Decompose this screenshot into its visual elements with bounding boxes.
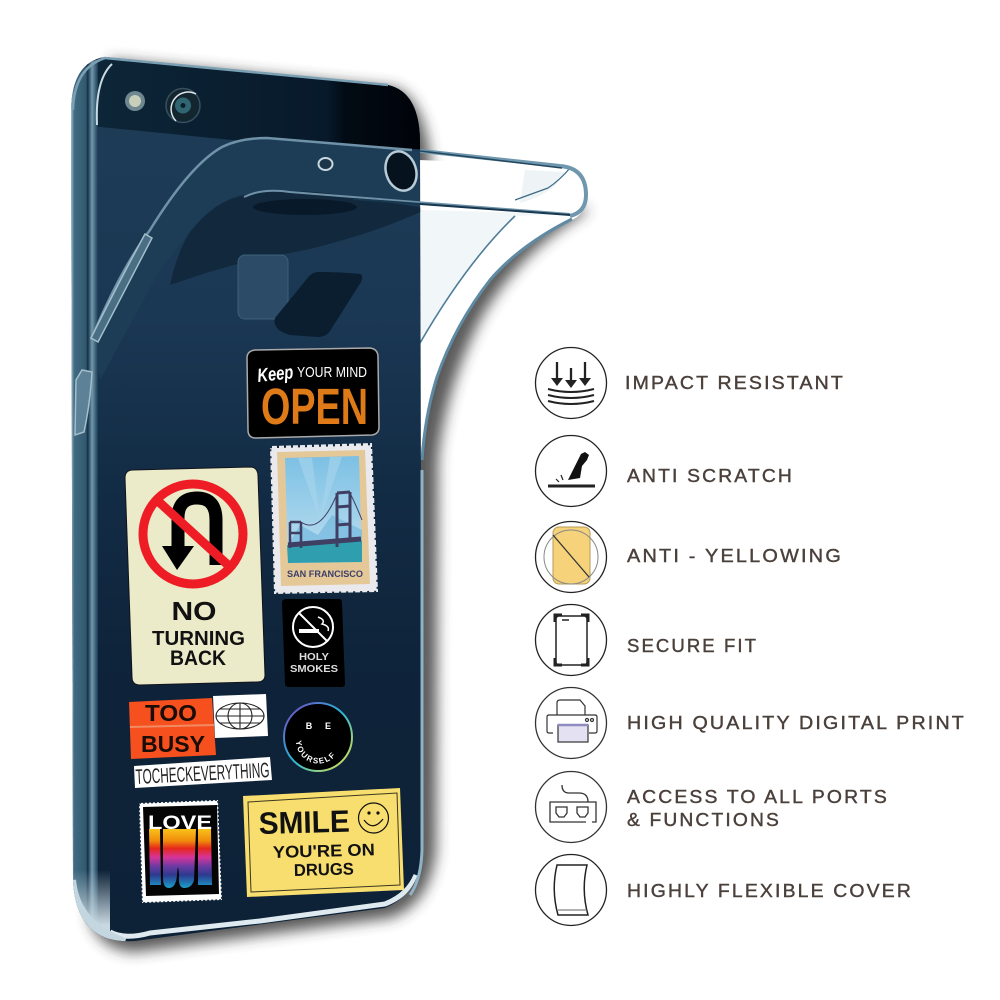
icon: phone case corners (536, 604, 606, 676)
sticker: san francisco stamp (270, 444, 378, 594)
feature: highly flexible cover (536, 854, 913, 926)
label: ACCESS TO ALL PORTS (627, 787, 889, 807)
label: & FUNCTIONS (627, 810, 781, 830)
label: ANTI - YELLOWING (627, 546, 843, 566)
icon: ports (536, 772, 606, 842)
dark top glass band (90, 57, 420, 150)
fingerprint square (238, 255, 288, 319)
label: IMPACT RESISTANT (625, 373, 845, 393)
flash (125, 91, 145, 111)
case small hole (318, 158, 332, 170)
sticker: no turning back (125, 467, 265, 685)
feature: anti scratch (536, 436, 794, 506)
icon: printer (536, 688, 606, 758)
icon: impact arrows (536, 348, 606, 418)
case slot (253, 199, 357, 215)
soft drop shadow (90, 60, 590, 952)
feature: anti yellowing (536, 522, 843, 592)
case camera hole (381, 147, 421, 195)
sticker: holy smokes: SMOKES (290, 663, 338, 675)
metal side edge (71, 60, 98, 950)
sticker: be yourself: B (306, 721, 313, 731)
icon: yellowed case crossed out (536, 522, 606, 592)
sticker: be yourself: E (325, 721, 331, 731)
label (627, 787, 889, 830)
case side button bumps (75, 234, 152, 435)
feature: high quality digital print (536, 688, 966, 758)
sticker: san francisco stamp: SAN FRANCISCO (287, 569, 363, 579)
sticker: keep your mind open (247, 348, 379, 438)
case top tint (98, 139, 348, 379)
sticker: keep your mind open: OPEN (261, 378, 368, 435)
sticker: too busy (129, 694, 272, 789)
feature: impact resistant (536, 348, 845, 418)
sticker: smile you're on drugs: DRUGS (294, 859, 354, 880)
clear case flexed wing (412, 150, 587, 460)
icon: blade scratch (536, 436, 606, 506)
sticker: no turning back: NO (172, 596, 216, 626)
sticker: too busy: TOO (145, 700, 197, 726)
sticker: no turning back: BACK (170, 647, 226, 670)
sticker: too busy: TOCHECKEVERYTHING (135, 759, 270, 789)
sticker: smile you're on drugs: SMILE (258, 804, 350, 841)
sticker: holy smokes: HOLY (299, 651, 329, 663)
sticker: keep your mind open: YOUR MIND (297, 365, 367, 381)
sticker: keep your mind open: Keep (256, 362, 294, 387)
golden gate bridge (288, 492, 362, 548)
no u-turn symbol (143, 484, 243, 584)
globe icon (216, 703, 264, 729)
phone with clear case (71, 50, 594, 962)
fingerprint cutout (275, 272, 362, 337)
phone body (60, 50, 430, 950)
label: SECURE FIT (627, 636, 758, 656)
case top arc highlights (91, 138, 570, 340)
sticker: holy smokes (282, 599, 345, 687)
sticker: too busy: BUSY (141, 731, 205, 757)
label: ANTI SCRATCH (627, 466, 794, 486)
feature: access to all ports (536, 772, 889, 842)
smiley (358, 803, 388, 833)
sticker: be yourself: YOURSELF (296, 740, 334, 764)
sticker: love stamp: LOVE (148, 813, 212, 834)
icon: flexible case (536, 854, 606, 926)
sticker: no turning back: TURNING (152, 628, 245, 650)
sticker: love stamp (139, 800, 222, 903)
shaded recess under case top (170, 191, 425, 285)
sticker: smile you're on drugs: YOU'RE ON (273, 840, 375, 862)
sticker: be yourself (283, 702, 353, 772)
sticker: smile you're on drugs (243, 788, 404, 897)
camera lens (166, 88, 200, 122)
label: HIGH QUALITY DIGITAL PRINT (627, 713, 966, 733)
label: HIGHLY FLEXIBLE COVER (627, 881, 913, 901)
feature: secure fit (536, 604, 758, 676)
